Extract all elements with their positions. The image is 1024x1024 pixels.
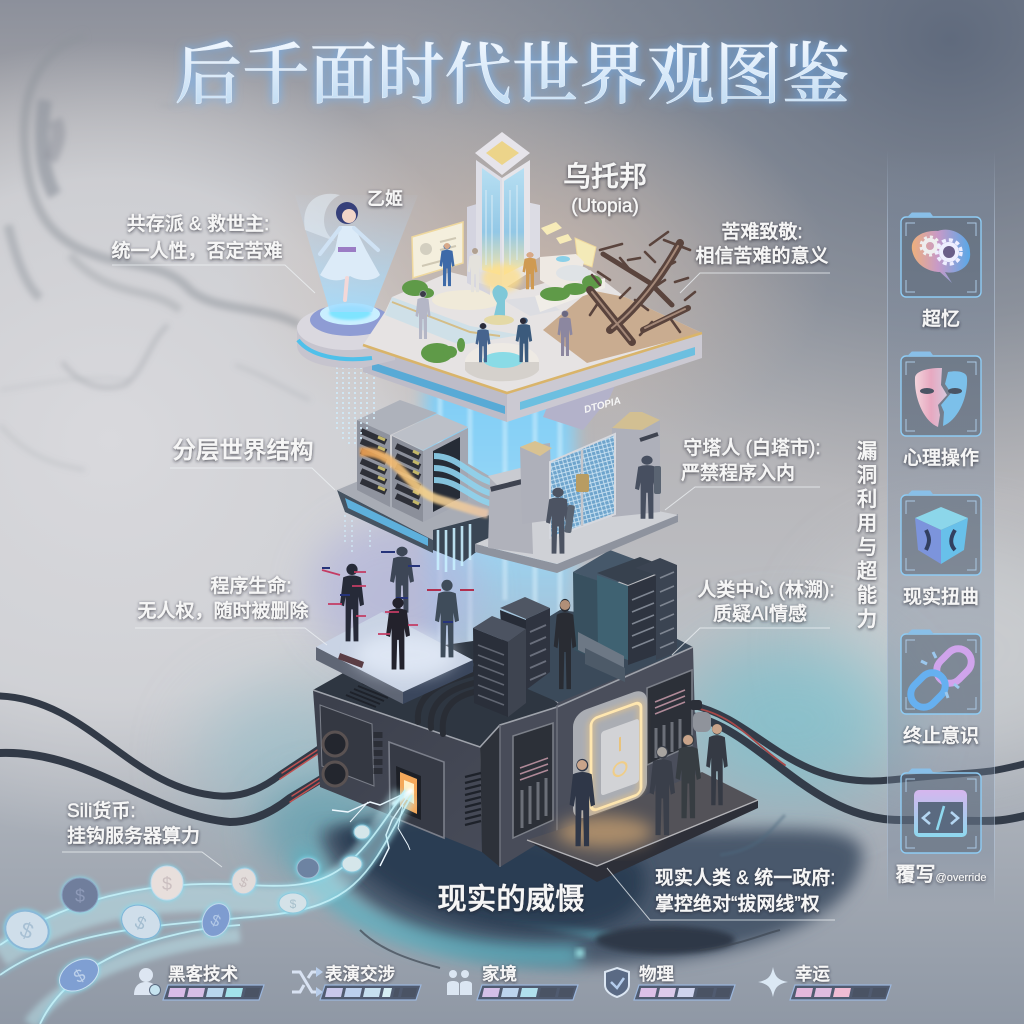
glowing port: [389, 742, 444, 838]
server B: [392, 414, 468, 522]
small residents: [416, 243, 572, 362]
ability: consciousness termination: 终止意识: [903, 725, 979, 747]
equipment pipes: [578, 632, 625, 682]
coins: $: [162, 874, 172, 894]
upper platform: Utopia: [295, 132, 702, 430]
ability: psychological manipulation: 心理操作: [903, 447, 979, 469]
suited people: [570, 723, 728, 846]
callout: real humans and government: 现实人类 & 统一政府:: [655, 867, 836, 889]
skill: performance and negotiation: [292, 964, 421, 1000]
statue and fountain: [465, 285, 539, 381]
glitched figure 2: [381, 547, 420, 613]
ability: hyper memory: 超忆: [922, 308, 960, 330]
big kill switch: [573, 687, 647, 822]
coins: $: [208, 912, 223, 931]
connector and cascade: [433, 515, 492, 572]
orange data stream: [360, 452, 488, 514]
callout: human centrism: [672, 579, 835, 655]
glitched figure 1: [322, 564, 366, 641]
data drip under halo pad: [337, 362, 374, 555]
thorn branches: [590, 232, 695, 342]
coins: $: [132, 912, 149, 934]
vertical heading: exploits and superpowers: 与: [857, 536, 877, 559]
hologram screens: [412, 222, 596, 278]
heading: layered world structure: [170, 437, 335, 490]
white tower: [467, 132, 540, 295]
ability: psychological manipulation: [901, 352, 981, 469]
platform under-banner: DTOPIA: [583, 396, 622, 416]
vertical heading: exploits and superpowers: 漏: [857, 440, 877, 463]
callout: tribute to suffering: [680, 221, 830, 293]
base machine: reality's deterrent: [313, 550, 758, 882]
heading: layered world structure: 分层世界结构: [172, 437, 314, 463]
label: Utopia: (Utopia): [571, 196, 639, 217]
label: Utopia: 乌托邦: [563, 161, 647, 192]
server A: [357, 400, 437, 507]
vertical heading: exploits and superpowers: 能: [857, 584, 877, 607]
Otohime figure: [304, 194, 380, 300]
storm slate area: [320, 829, 862, 965]
sandy thorn zone: [543, 290, 702, 363]
callout: Sili currency: 挂钩服务器算力: [67, 825, 200, 847]
vertical heading: exploits and superpowers: 用: [857, 512, 877, 535]
corner faces: [313, 647, 700, 867]
coin stream: [0, 790, 412, 1024]
left cables: [0, 696, 328, 822]
skill: physique: 物理: [639, 964, 674, 984]
coins: $: [75, 886, 85, 906]
guard right: [635, 456, 661, 519]
callout: tower guardians: 严禁程序入内: [681, 462, 795, 484]
front rack: [473, 616, 526, 717]
hologram cone: [295, 195, 418, 312]
seating: [540, 254, 590, 290]
planters: [402, 275, 605, 363]
skill: family background: 家境: [482, 964, 517, 984]
halo pad: [297, 303, 399, 368]
callout: tribute to suffering: 相信苦难的意义: [695, 245, 829, 267]
right cables: [692, 705, 1024, 821]
ability: consciousness termination: [901, 630, 981, 747]
guard left: [546, 488, 575, 554]
right slab: [475, 505, 678, 573]
three pipes: [418, 673, 474, 734]
coins: [0, 825, 370, 998]
callout: Sili currency: Sili货币:: [67, 800, 136, 822]
middle layer: layered world: [337, 400, 678, 573]
vent: side: [465, 773, 481, 825]
floor plate: [527, 772, 758, 882]
skill: performance and negotiation: 表演交涉: [325, 964, 395, 984]
skill: family background: [447, 964, 578, 1000]
ability: reality warping: [901, 491, 981, 608]
vertical heading: exploits and superpowers: 力: [857, 608, 877, 631]
skill bars: [134, 964, 891, 1000]
coins: $: [17, 917, 37, 944]
mesh gate: [550, 434, 615, 538]
lilac glow behind program figures: [310, 520, 480, 660]
callout: tower guardians: 守塔人 (白塔市):: [683, 437, 821, 459]
blue data streams: [434, 456, 497, 505]
side panel: abilities: [887, 150, 995, 905]
heading: reality's deterrent: 现实的威慑: [437, 883, 585, 916]
vertical heading: exploits and superpowers: 超: [857, 560, 877, 583]
coins: $: [290, 897, 297, 911]
panel frame with cable sockets: [320, 705, 378, 786]
label: Otohime: 乙姬: [367, 189, 403, 209]
callout: Sili currency: [62, 800, 222, 867]
coins: $: [237, 873, 250, 891]
callout: tribute to suffering: 苦难致敬:: [721, 221, 803, 243]
callout: real humans and government: [607, 867, 836, 920]
man: Lin Su: [554, 599, 576, 689]
skill: hacking: 黑客技术: [168, 964, 238, 984]
callout: human centrism: 人类中心 (林溯):: [697, 579, 835, 601]
vertical heading: exploits and superpowers: 洞: [857, 464, 877, 487]
callout: program life: 无人权，随时被删除: [137, 600, 309, 622]
ability: reality warping: 现实扭曲: [903, 586, 979, 608]
right vents: [513, 670, 692, 838]
ability: override: 覆写@override: [896, 864, 986, 886]
skill: luck: 幸运: [795, 964, 830, 984]
sides of platform: [363, 333, 702, 422]
title: 后千面时代世界观图鉴: [174, 38, 850, 113]
ability: override: [896, 769, 986, 886]
base top faces: [313, 610, 693, 747]
ability: hyper memory: [901, 213, 981, 330]
left face: [313, 690, 482, 852]
callout: tower guardians: [665, 437, 821, 510]
glitched figure 4: [427, 580, 474, 657]
vent: top: [346, 683, 392, 707]
callout: program life: 程序生命:: [210, 574, 292, 597]
vertical heading: exploits and superpowers: 利: [857, 488, 877, 511]
terraces and steps: [385, 290, 560, 345]
soft band: [0, 795, 405, 1024]
glow paths: [0, 790, 412, 1024]
skill: luck: [758, 964, 891, 1000]
blue light column: [425, 385, 575, 650]
coins: $: [70, 965, 89, 987]
label: Utopia: [563, 161, 647, 217]
program platform: [316, 547, 474, 704]
back server cluster: [573, 550, 677, 665]
plate: [316, 612, 473, 704]
platform under-banner: [543, 367, 623, 430]
lightning: [332, 790, 412, 866]
platform top: [363, 270, 702, 393]
right plug: [690, 700, 711, 732]
skill: physique: [605, 964, 735, 1000]
left slab: [337, 447, 530, 553]
callout: real humans and government: 掌控绝对“拔网线”权: [655, 893, 820, 915]
skill: hacking: [134, 964, 264, 1000]
callout: coexistence faction: [111, 213, 315, 293]
second rack: [500, 597, 550, 692]
callout: coexistence faction: 统一人性，否定苦难: [111, 240, 283, 262]
gold trim: [363, 333, 702, 393]
gate walls: [488, 412, 660, 554]
callout: coexistence faction: 共存派 & 救世主:: [127, 213, 269, 235]
callout: human centrism: 质疑AI情感: [713, 603, 807, 625]
callout: program life: [135, 574, 327, 645]
glitched figure 3: [378, 598, 418, 670]
